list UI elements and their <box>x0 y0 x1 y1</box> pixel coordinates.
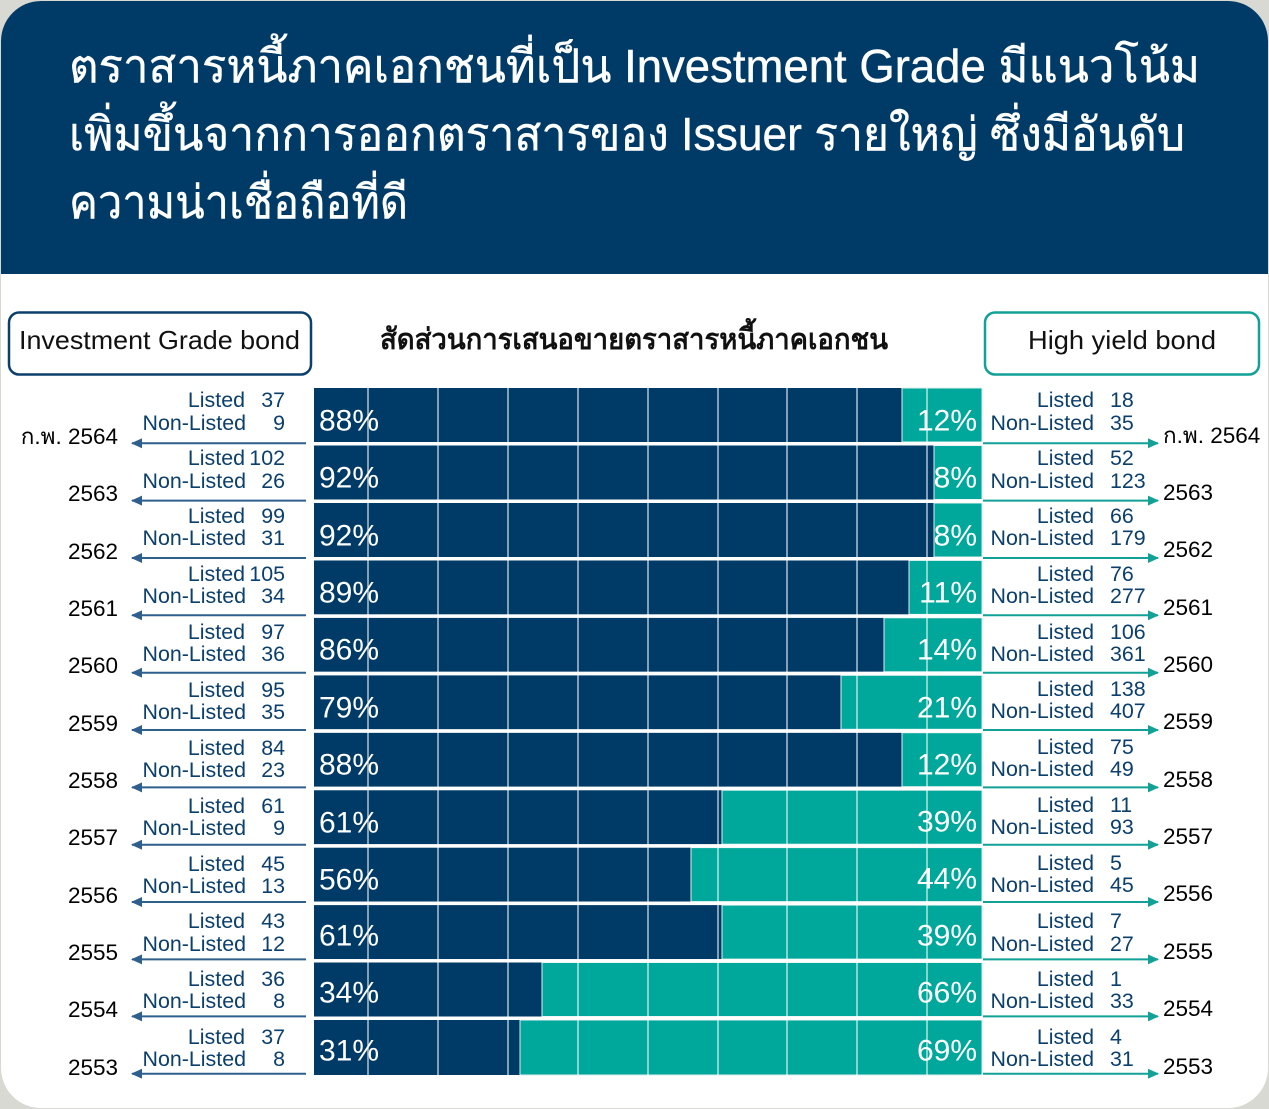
right listed counts: Listed <box>1037 967 1094 991</box>
right listed counts: 4 <box>1110 1025 1122 1049</box>
left listed counts: 8 <box>273 989 285 1013</box>
left listed counts: 34 <box>261 584 285 608</box>
right listed counts: 66 <box>1110 504 1134 528</box>
left listed counts: Non-Listed <box>143 874 246 898</box>
left years: 2556 <box>68 883 118 908</box>
left listed counts: 36 <box>261 642 285 666</box>
right years: 2555 <box>1163 939 1213 964</box>
right years: 2558 <box>1163 767 1213 792</box>
right years: 2561 <box>1163 595 1213 620</box>
legend: High yield bond: High yield bond <box>1028 325 1216 355</box>
left listed counts: 26 <box>261 469 285 493</box>
left listed counts: 105 <box>249 562 285 586</box>
left listed counts: Listed <box>188 1025 245 1049</box>
high yield percentages <box>917 404 977 1067</box>
right listed counts: Non-Listed <box>991 989 1094 1013</box>
right listed counts: Non-Listed <box>991 873 1094 897</box>
right listed counts: 18 <box>1110 388 1134 412</box>
right listed counts: 35 <box>1110 411 1134 435</box>
investment grade percentages: 34% <box>319 976 379 1009</box>
high yield percentages: 39% <box>917 919 977 952</box>
gridlines <box>368 388 927 1075</box>
left listed counts <box>143 388 285 1071</box>
investment grade percentages: 79% <box>319 691 379 724</box>
title <box>69 33 1200 228</box>
investment grade percentages <box>319 404 379 1067</box>
right listed counts: Listed <box>1037 446 1094 470</box>
left listed counts: 61 <box>261 794 285 818</box>
right years: 2557 <box>1163 824 1213 849</box>
right years: ก.พ. 2564 <box>1163 423 1260 448</box>
high yield percentages: 11% <box>919 576 977 609</box>
left listed counts: 37 <box>261 1025 285 1049</box>
left listed counts: Listed <box>188 909 245 933</box>
left listed counts: Listed <box>188 388 245 412</box>
right years: 2556 <box>1163 881 1213 906</box>
right years: 2562 <box>1163 537 1213 562</box>
investment grade percentages: 92% <box>319 519 379 552</box>
right listed counts: 93 <box>1110 815 1134 839</box>
right listed counts: 76 <box>1110 562 1134 586</box>
right listed counts: 106 <box>1110 620 1146 644</box>
right listed counts: 407 <box>1110 699 1146 723</box>
right listed counts: Listed <box>1037 851 1094 875</box>
right listed counts: 52 <box>1110 446 1134 470</box>
left listed counts: Listed <box>188 794 245 818</box>
left listed counts: Non-Listed <box>143 469 246 493</box>
right listed counts: 123 <box>1110 469 1146 493</box>
investment grade percentages: 88% <box>319 748 379 781</box>
right listed counts: Listed <box>1037 677 1094 701</box>
investment grade percentages: 86% <box>319 633 379 666</box>
left listed counts: 102 <box>249 446 285 470</box>
left listed counts: 95 <box>261 678 285 702</box>
right listed counts: 1 <box>1110 967 1122 991</box>
right listed counts: 7 <box>1110 909 1122 933</box>
left listed counts: Non-Listed <box>143 642 246 666</box>
right arrows <box>983 443 1158 1074</box>
investment grade percentages: 89% <box>319 576 379 609</box>
left listed counts: Non-Listed <box>143 989 246 1013</box>
investment grade percentages: 56% <box>319 863 379 896</box>
high yield percentages: 69% <box>917 1034 977 1067</box>
left listed counts: 97 <box>261 620 285 644</box>
left listed counts: 9 <box>273 816 285 840</box>
left listed counts: 12 <box>261 932 285 956</box>
right listed counts: Non-Listed <box>991 526 1094 550</box>
left years: 2554 <box>68 997 118 1022</box>
right years: 2563 <box>1163 480 1213 505</box>
right listed counts: Non-Listed <box>991 584 1094 608</box>
right listed counts: 277 <box>1110 584 1146 608</box>
right listed counts: 33 <box>1110 989 1134 1013</box>
stacked bar chart <box>314 388 982 1075</box>
left listed counts: 8 <box>273 1047 285 1071</box>
left listed counts: 31 <box>261 526 285 550</box>
left listed counts: Non-Listed <box>143 700 246 724</box>
left listed counts: 99 <box>261 504 285 528</box>
left years: ก.พ. 2564 <box>21 424 118 449</box>
high yield percentages: 8% <box>934 461 977 494</box>
high yield percentages: 8% <box>934 519 977 552</box>
right listed counts: 75 <box>1110 735 1134 759</box>
high yield percentages: 66% <box>917 976 977 1009</box>
left listed counts: Listed <box>188 446 245 470</box>
right listed counts: Listed <box>1037 388 1094 412</box>
investment grade percentages: 61% <box>319 806 379 839</box>
left years: 2559 <box>68 711 118 736</box>
right listed counts: Non-Listed <box>991 932 1094 956</box>
title: ตราสารหนี้ภาคเอกชนที่เป็น Investment Grade มีแนวโน้ม <box>69 33 1200 92</box>
legend: Investment Grade bond: Investment Grade bond <box>19 325 300 355</box>
high yield percentages: 21% <box>917 691 977 724</box>
left listed counts: Non-Listed <box>143 1047 246 1071</box>
investment grade percentages: 61% <box>319 919 379 952</box>
left listed counts: 35 <box>261 700 285 724</box>
right listed counts: Listed <box>1037 735 1094 759</box>
high yield percentages: 12% <box>917 404 977 437</box>
right listed counts: Listed <box>1037 504 1094 528</box>
high yield percentages: 12% <box>917 748 977 781</box>
left listed counts: 9 <box>273 411 285 435</box>
right listed counts: Non-Listed <box>991 469 1094 493</box>
left years: 2562 <box>68 539 118 564</box>
right years: 2553 <box>1163 1054 1213 1079</box>
left listed counts: 45 <box>261 852 285 876</box>
high yield percentages: 39% <box>917 805 977 838</box>
chart heading: สัดส่วนการเสนอขายตราสารหนี้ภาคเอกชน <box>380 317 888 356</box>
right listed counts: 45 <box>1110 873 1134 897</box>
right listed counts: 361 <box>1110 642 1146 666</box>
left arrows <box>132 443 306 1074</box>
header banner <box>1 1 1268 274</box>
left years: 2563 <box>68 481 118 506</box>
right listed counts: Listed <box>1037 1025 1094 1049</box>
high yield percentages: 14% <box>917 633 977 666</box>
left years: 2558 <box>68 768 118 793</box>
right listed counts: Non-Listed <box>991 815 1094 839</box>
right listed counts: Non-Listed <box>991 642 1094 666</box>
right listed counts: Listed <box>1037 620 1094 644</box>
right listed counts: 11 <box>1110 793 1132 817</box>
right listed counts: 179 <box>1110 526 1146 550</box>
right listed counts: Non-Listed <box>991 699 1094 723</box>
title: เพิ่มขึ้นจากการออกตราสารของ Issuer รายใหญ่ ซึ่งมีอันดับ <box>69 101 1185 160</box>
right listed counts: 49 <box>1110 757 1134 781</box>
left listed counts: 84 <box>261 736 285 760</box>
left listed counts: Listed <box>188 967 245 991</box>
left listed counts: Non-Listed <box>143 932 246 956</box>
left listed counts: Non-Listed <box>143 584 246 608</box>
left listed counts: 13 <box>261 874 285 898</box>
right listed counts: 138 <box>1110 677 1146 701</box>
left listed counts: Listed <box>188 852 245 876</box>
right listed counts: 27 <box>1110 932 1134 956</box>
left listed counts: 23 <box>261 758 285 782</box>
left listed counts: 36 <box>261 967 285 991</box>
right listed counts: Non-Listed <box>991 757 1094 781</box>
left listed counts: 43 <box>261 909 285 933</box>
right years <box>1163 423 1260 1079</box>
left listed counts: Listed <box>188 620 245 644</box>
investment grade percentages: 92% <box>319 461 379 494</box>
investment grade percentages: 88% <box>319 404 379 437</box>
left years: 2555 <box>68 940 118 965</box>
right listed counts: Non-Listed <box>991 1047 1094 1071</box>
left listed counts: Listed <box>188 678 245 702</box>
left listed counts: Non-Listed <box>143 526 246 550</box>
left listed counts: Non-Listed <box>143 816 246 840</box>
right listed counts: Non-Listed <box>991 411 1094 435</box>
left listed counts: Listed <box>188 504 245 528</box>
left listed counts: Listed <box>188 736 245 760</box>
legend: Investment Grade bond <box>9 312 311 374</box>
investment grade percentages: 31% <box>319 1034 379 1067</box>
left listed counts: 37 <box>261 388 285 412</box>
title: ความน่าเชื่อถือที่ดี <box>69 170 408 228</box>
legend: High yield bond <box>985 312 1259 374</box>
right listed counts: Listed <box>1037 793 1094 817</box>
right listed counts: Listed <box>1037 562 1094 586</box>
right listed counts <box>991 388 1146 1071</box>
left listed counts: Listed <box>188 562 245 586</box>
left years <box>21 424 118 1080</box>
left years: 2561 <box>68 596 118 621</box>
left years: 2557 <box>68 825 118 850</box>
right listed counts: 31 <box>1110 1047 1134 1071</box>
right listed counts: Listed <box>1037 909 1094 933</box>
right years: 2554 <box>1163 996 1213 1021</box>
high yield percentages: 44% <box>917 862 977 895</box>
right years: 2559 <box>1163 709 1213 734</box>
right listed counts: 5 <box>1110 851 1122 875</box>
left listed counts: Non-Listed <box>143 758 246 782</box>
left years: 2560 <box>68 653 118 678</box>
left listed counts: Non-Listed <box>143 411 246 435</box>
left years: 2553 <box>68 1055 118 1080</box>
right years: 2560 <box>1163 652 1213 677</box>
